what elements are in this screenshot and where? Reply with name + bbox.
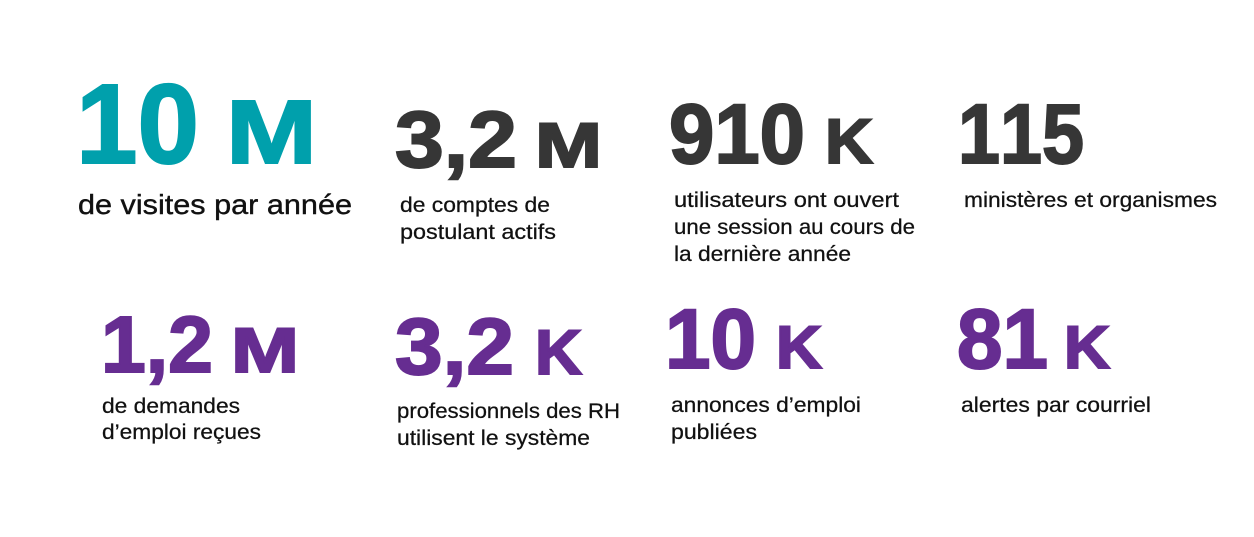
number: 910 K: 910 [669,87,805,181]
label: users: la dernière année [674,243,851,266]
label: users: utilisateurs ont ouvert [674,189,899,212]
label: users [674,189,915,266]
label: job postings [671,394,861,444]
stat: 10 K job postings [665,292,861,444]
stat: 1,2 M applications [101,300,299,444]
number: 10 M [76,61,317,187]
number: 3,2 K: K [535,318,582,388]
stat: 81 K email alerts [957,292,1151,417]
label: accounts [400,194,556,244]
label: HR professionals [397,400,620,450]
number: 81 K [957,292,1110,386]
number: 3,2 M: M [535,111,602,181]
label: users: une session au cours de [674,216,915,239]
label: applications: d’emploi reçues [102,421,261,444]
number: 10 K [665,292,822,386]
stat: 910 K users [669,87,915,266]
label: HR professionals: professionnels des RH [397,400,620,423]
number: 81 K: 81 [957,292,1048,386]
stat: 115 departments [958,87,1217,212]
number: 10 M: M [226,83,317,183]
label: accounts: de comptes de [400,194,550,217]
label: departments: ministères et organismes [964,189,1217,212]
label: HR professionals: utilisent le système [397,427,590,450]
number: 3,2 M [395,95,602,184]
number: 1,2 M: 1,2 [101,300,213,389]
label: applications [102,395,261,444]
label: job postings: publiées [671,421,757,444]
number: 10 M: 10 [76,61,199,187]
label: visits: de visites par année [78,189,352,220]
number: 1,2 M: M [231,316,299,386]
number: 3,2 M: 3,2 [395,95,517,184]
number: 3,2 K [395,302,582,391]
stat: 10 M visits [76,61,352,220]
number: 910 K [669,87,873,181]
stat: 3,2 M accounts [395,95,602,244]
number: 10 K: K [776,314,822,381]
number: 115: 115 [958,87,1084,181]
number: 910 K: K [825,107,873,177]
number: 81 K: K [1064,314,1110,381]
label: email alerts: alertes par courriel [961,394,1151,417]
number: 1,2 M [101,300,299,389]
number: 10 K: 10 [665,292,756,386]
label: applications: de demandes [102,395,240,418]
label: job postings: annonces d’emploi [671,394,861,417]
stat: 3,2 K HR professionals [395,302,620,450]
label: accounts: postulant actifs [400,221,556,244]
number: 3,2 K: 3,2 [395,302,514,391]
